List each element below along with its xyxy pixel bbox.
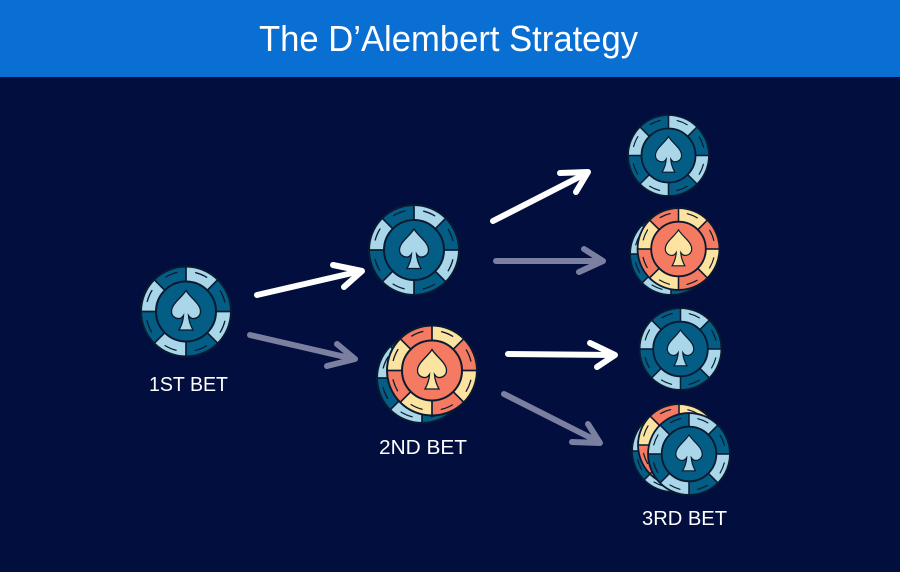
arrow: gray to fourth chip stack: [504, 394, 600, 443]
chip: 2nd bet win blue: [366, 202, 462, 298]
label: 3rd bet: 3RD BET: [642, 508, 727, 530]
arrow: 1st bet loss: [250, 335, 355, 366]
arrow: up to top chip: [493, 172, 588, 221]
title: The D’Alembert Strategy: [259, 18, 638, 59]
arrow: gray to second chip stack: [496, 249, 603, 272]
chip: 3rd bet top blue: [625, 112, 712, 199]
label: 2nd bet: 2ND BET: [379, 437, 467, 459]
chip stack: 3rd bet red over blue: [627, 205, 723, 298]
chip: 1st bet blue: [138, 263, 234, 360]
label: 1st bet: 1ST BET: [149, 374, 228, 396]
arrow: white to third chip: [508, 343, 615, 367]
chip stack: 3rd bet three chips: [629, 401, 733, 498]
title banner: [0, 0, 900, 77]
chip stack: 2nd bet loss: [374, 322, 480, 426]
chip: 3rd bet blue: [636, 305, 725, 393]
arrow: 1st bet win: [257, 265, 362, 295]
